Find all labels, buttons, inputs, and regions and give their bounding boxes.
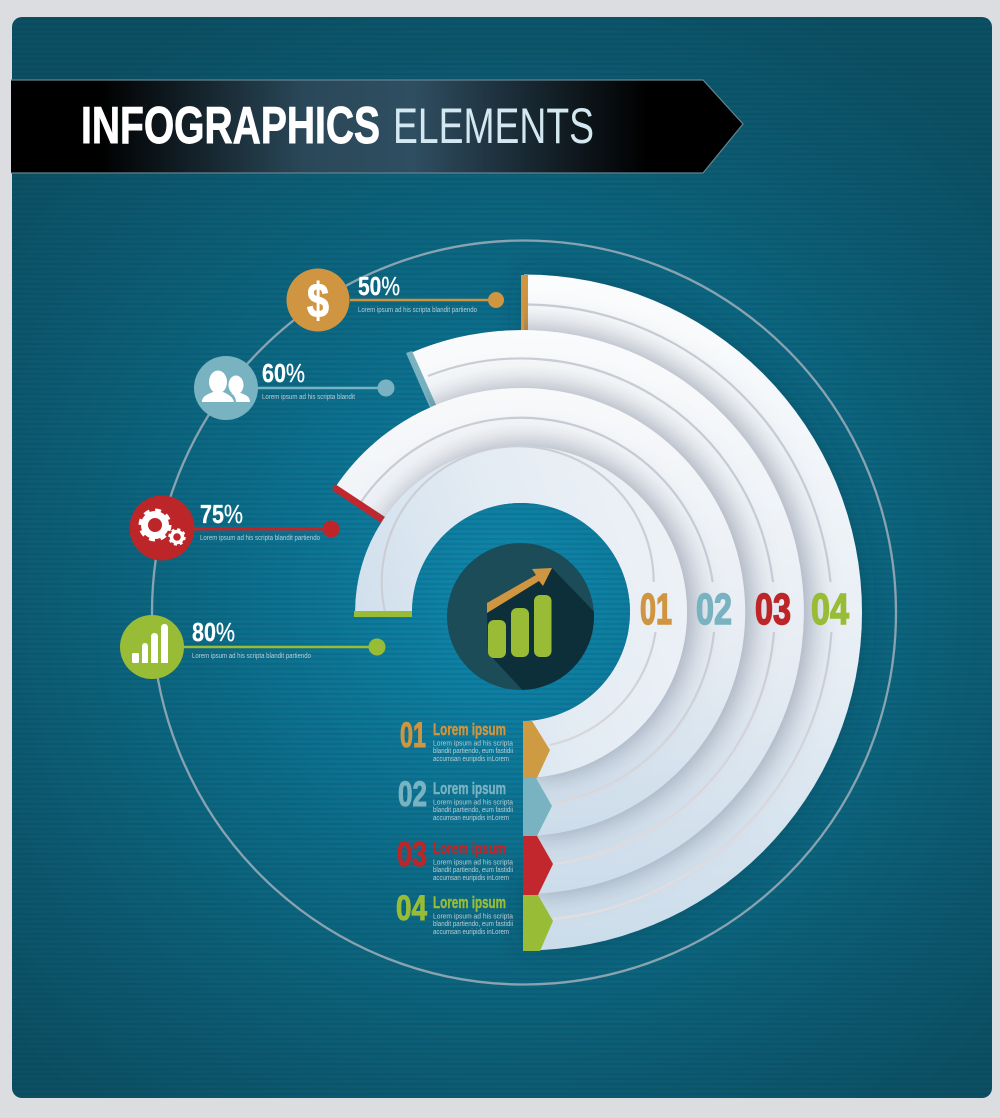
ring 04 end bar — [521, 275, 528, 331]
ring numbers: 02 — [696, 585, 732, 634]
callout: 60%: Lorem ipsum ad his scripta blandit — [262, 394, 355, 401]
legend 04 — [396, 889, 513, 936]
legend 02: Lorem ipsum ad his scripta — [433, 800, 513, 806]
legend 02: accumsan euripidis inLorem — [433, 815, 509, 822]
ring 04 — [521, 274, 862, 950]
ring 01 — [354, 446, 687, 778]
legend 01: Lorem ipsum ad his scripta — [433, 740, 513, 748]
ring numbers: 01 — [640, 585, 672, 634]
legend 01: Lorem ipsum — [433, 720, 506, 739]
title: INFOGRAPHICS — [81, 97, 380, 155]
legend 01 — [400, 716, 513, 763]
callout: 75% — [130, 496, 340, 560]
bottom arrow tabs — [523, 721, 553, 951]
callout: 80%: 80% — [192, 617, 235, 647]
legend 04: accumsan euripidis inLorem — [433, 929, 509, 936]
legend 02: blandit partiendo, eum fastidii — [433, 807, 513, 814]
legend 01: 01 — [400, 716, 426, 755]
legend 04: blandit partiendo, eum fastidii — [433, 921, 513, 928]
legend 03 — [397, 835, 513, 882]
legend 03: Lorem ipsum — [433, 839, 506, 858]
ring numbers: 04 — [811, 585, 849, 634]
center icon: growth chart — [447, 543, 594, 690]
arrow — [487, 568, 552, 613]
legend 04: 04 — [396, 889, 427, 928]
legend 03: blandit partiendo, eum fastidii — [433, 867, 513, 874]
legend 04: Lorem ipsum — [433, 893, 506, 912]
callout: 50%: 50% — [358, 271, 400, 301]
icon: dollar — [286, 268, 350, 332]
bars — [488, 595, 552, 658]
legend 03: Lorem ipsum ad his scripta — [433, 860, 513, 866]
icon: gears — [130, 496, 194, 560]
ring 01 end bar — [354, 611, 412, 617]
legend 01: blandit partiendo, eum fastidii — [433, 748, 513, 755]
callout: 50% — [286, 268, 504, 332]
callout: 60% — [194, 356, 394, 420]
callout: 75%: 75% — [200, 499, 243, 529]
callout: 60%: 60% — [262, 358, 305, 388]
legend 03: 03 — [397, 835, 427, 874]
guide circle — [152, 240, 896, 984]
legend 01: accumsan euripidis inLorem — [433, 756, 509, 763]
callout: 80%: Lorem ipsum ad his scripta blandit partiendo — [192, 653, 311, 660]
icon: people — [194, 356, 258, 420]
legend 02 — [398, 775, 513, 822]
callout: 80% — [120, 615, 386, 679]
ring numbers — [640, 585, 849, 634]
legend 02: Lorem ipsum — [433, 779, 506, 798]
ring 02 — [332, 388, 745, 836]
long shadow — [487, 568, 594, 690]
legend 03: accumsan euripidis inLorem — [433, 875, 509, 882]
callout: 50%: Lorem ipsum ad his scripta blandit partiendo — [358, 307, 477, 314]
title: ELEMENTS — [393, 98, 594, 154]
ring 03 end bar — [406, 351, 437, 410]
icon: signal bars — [120, 615, 184, 679]
icon: dollar: $ — [307, 275, 329, 328]
legend 02: 02 — [398, 775, 427, 814]
ring 03 — [406, 330, 804, 894]
legend 04: Lorem ipsum ad his scripta — [433, 914, 513, 920]
ring 02 end bar — [332, 484, 388, 525]
title ribbon — [11, 80, 743, 173]
callout: 75%: Lorem ipsum ad his scripta blandit partiendo — [200, 535, 320, 542]
ring numbers: 03 — [755, 585, 791, 634]
